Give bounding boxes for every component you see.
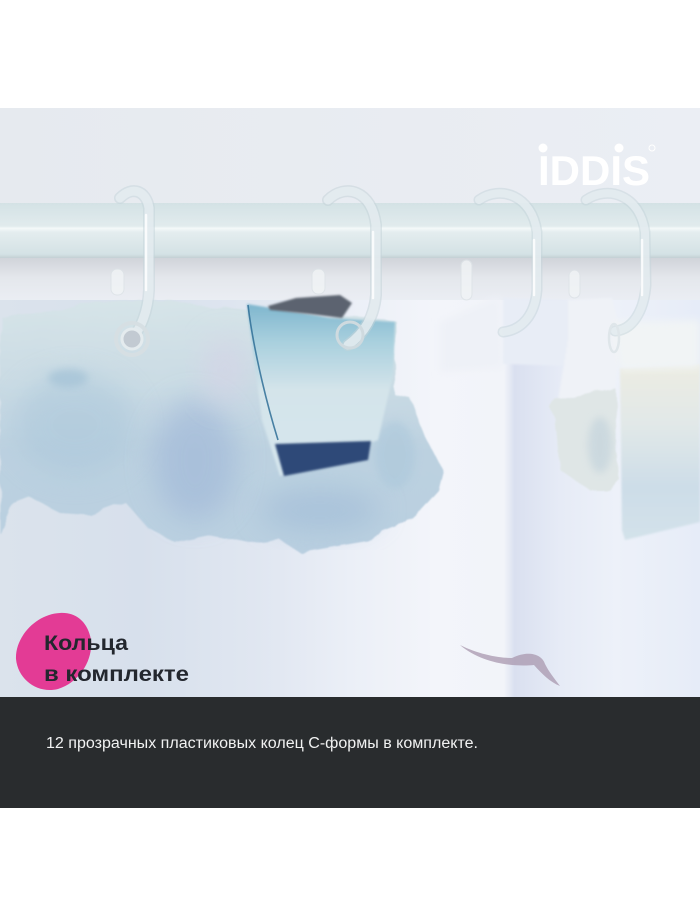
- right watercolor patch: [620, 364, 700, 540]
- ring 4: [586, 193, 646, 352]
- curtain rod: [0, 203, 700, 258]
- heading: Кольца: [44, 632, 128, 655]
- ring 2: [328, 191, 376, 348]
- watercolor cup on fold: [247, 295, 395, 476]
- purple brush stroke: [460, 645, 560, 686]
- logo: IDDIS: IDDIS: [538, 147, 650, 194]
- ring 1: [116, 191, 149, 355]
- heading: [44, 632, 189, 686]
- caption text: 12 прозрачных пластиковых колец С-формы в комплекте.: [46, 735, 478, 752]
- watercolor wash: main blue stain: [0, 300, 443, 552]
- photo: curtain on rod: [0, 108, 700, 697]
- small watercolor patch: [550, 388, 620, 490]
- heading: в комплекте: [44, 663, 189, 686]
- curtain hooks behind rod: [111, 260, 580, 300]
- dark caption band: [0, 697, 700, 808]
- right pleat top: [440, 296, 503, 372]
- pink blob: [16, 613, 91, 690]
- ring 3: [479, 193, 537, 332]
